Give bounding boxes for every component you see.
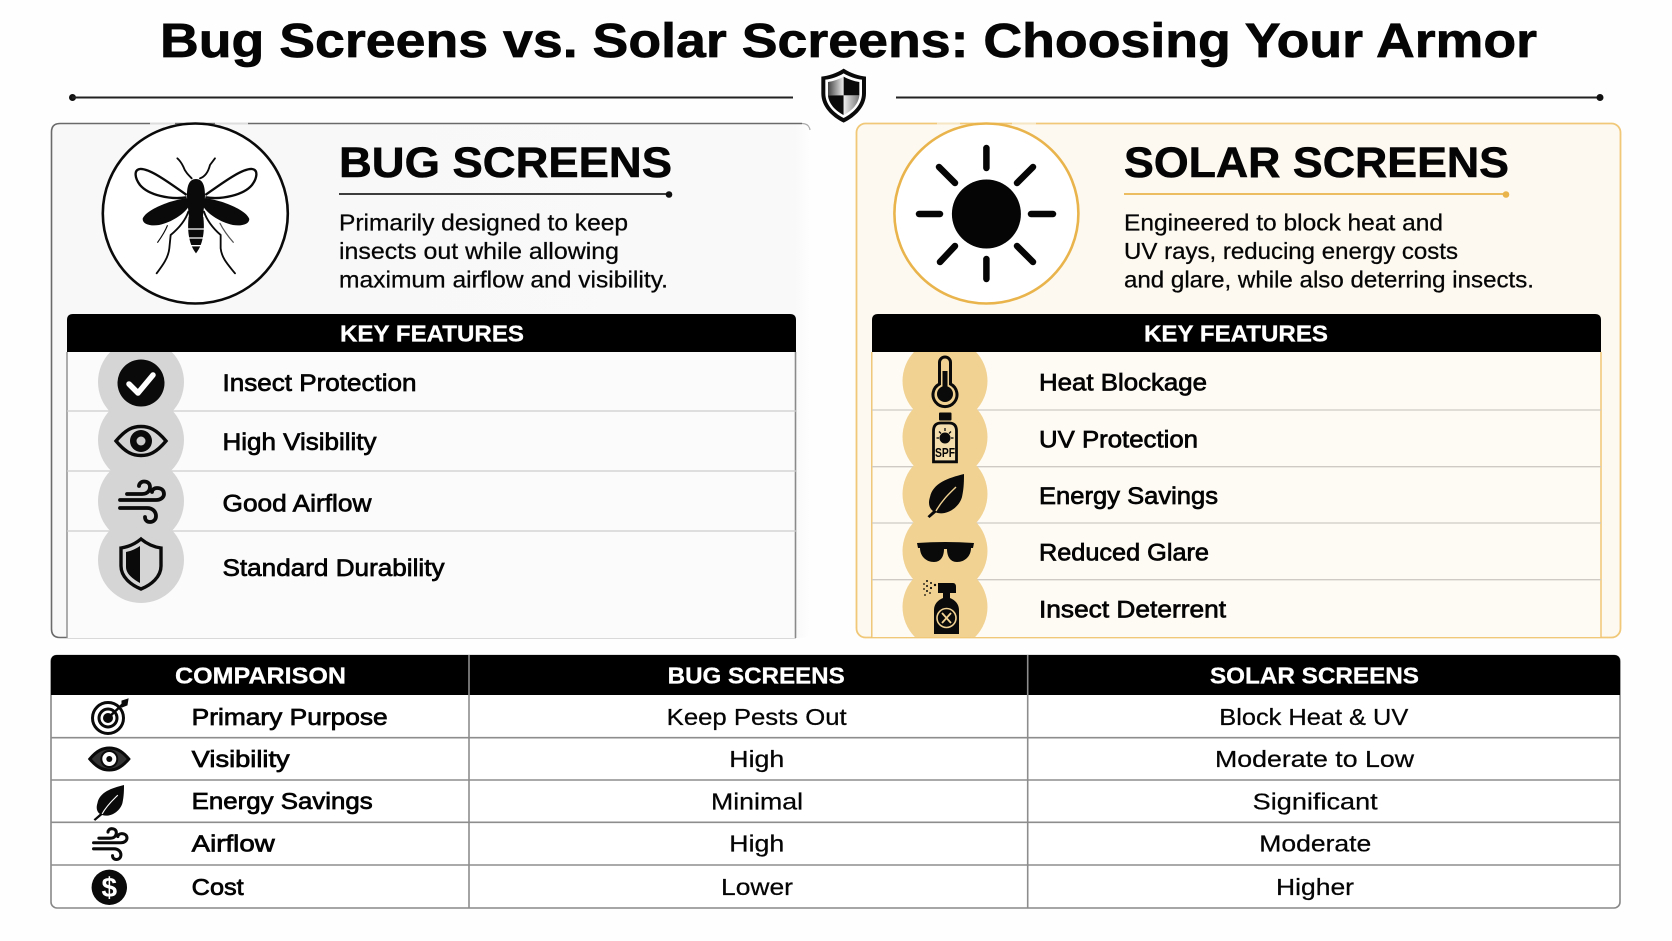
row: cost	[92, 870, 1354, 905]
row: cost: Lower	[721, 874, 793, 900]
icon: wind	[94, 829, 127, 859]
feature: good airflow: Good Airflow	[222, 490, 372, 518]
icon: eye	[116, 426, 166, 456]
feature: heat blockage: Heat Blockage	[1039, 370, 1207, 396]
feature: UV protection: UV Protection	[1039, 426, 1198, 453]
row: primary purpose: Primary Purpose	[192, 704, 388, 730]
icon: mosquito in circle	[103, 124, 288, 304]
key features header: KEY FEATURES	[1144, 320, 1328, 346]
row: energy savings: Significant	[1253, 788, 1378, 814]
description: solar screens	[1124, 210, 1534, 292]
row: energy savings: Minimal	[711, 788, 803, 814]
row: energy savings: Energy Savings	[192, 788, 373, 814]
icon: shield	[821, 69, 866, 123]
icon: dollar: $	[102, 872, 118, 903]
panel: solar screens	[856, 124, 1620, 650]
row: cost: Higher	[1276, 874, 1354, 900]
icon: eye	[90, 748, 129, 770]
row: primary purpose	[92, 699, 1409, 734]
heading: solar screens: SOLAR SCREENS	[1124, 139, 1509, 187]
heading rule	[1124, 191, 1509, 198]
title divider with shield	[69, 69, 1604, 123]
icon: SPF bottle	[934, 412, 956, 462]
icon: leaf	[94, 785, 124, 821]
icon: spray bottle	[923, 580, 959, 634]
key features header	[872, 314, 1601, 352]
heading: bug screens: BUG SCREENS	[339, 139, 672, 187]
description: solar screens: and glare, while also deterring insects.	[1124, 266, 1534, 292]
row: visibility: High	[729, 746, 784, 772]
icon: sunglasses	[917, 542, 974, 562]
feature: reduced glare: Reduced Glare	[1039, 540, 1209, 567]
feature: energy savings: Energy Savings	[1039, 483, 1218, 510]
description: bug screens: insects out while allowing	[339, 238, 619, 264]
icon: dollar	[92, 870, 127, 905]
icon: thermometer	[933, 357, 957, 407]
feature: high visibility: High Visibility	[222, 429, 376, 456]
icon: wind	[120, 482, 164, 522]
feature: insect deterrent: Insect Deterrent	[1039, 596, 1226, 623]
panel: bug screens	[51, 123, 810, 638]
row: energy savings	[94, 785, 1378, 821]
comparison table	[51, 655, 1620, 908]
icon: leaf	[928, 474, 964, 518]
description: solar screens: UV rays, reducing energy costs	[1124, 238, 1458, 264]
icon: shield half	[121, 539, 161, 589]
row: primary purpose: Keep Pests Out	[667, 704, 847, 730]
row: airflow	[94, 829, 1371, 859]
table header row	[175, 662, 1419, 688]
heading rule	[339, 191, 672, 198]
table header row: BUG SCREENS	[668, 662, 845, 688]
row: primary purpose: Block Heat & UV	[1219, 704, 1409, 730]
table header row: SOLAR SCREENS	[1210, 662, 1419, 688]
key features header	[67, 314, 796, 352]
icon: sun in circle	[894, 124, 1078, 304]
row: visibility	[90, 746, 1414, 772]
row: cost: Cost	[192, 874, 244, 900]
key features header: KEY FEATURES	[340, 320, 524, 346]
title: Bug Screens vs. Solar Screens: Choosing Your Armor	[160, 15, 1537, 68]
description: bug screens: Primarily designed to keep	[339, 210, 628, 236]
description: solar screens: Engineered to block heat and	[1124, 210, 1443, 236]
table header row: COMPARISON	[175, 662, 346, 688]
row: airflow: High	[729, 830, 784, 856]
row: visibility: Moderate to Low	[1215, 746, 1414, 772]
row: airflow: Moderate	[1259, 830, 1371, 856]
icon: check	[118, 360, 164, 406]
icon: SPF bottle: SPF	[935, 445, 955, 460]
feature badge circles	[902, 338, 988, 650]
row: airflow: Airflow	[192, 831, 275, 857]
feature badge circles	[98, 339, 184, 603]
feature: insect protection: Insect Protection	[222, 370, 416, 397]
feature: standard durability: Standard Durability	[222, 555, 444, 582]
description: bug screens	[339, 210, 668, 292]
row: visibility: Visibility	[192, 746, 290, 772]
icon: target	[92, 699, 128, 734]
description: bug screens: maximum airflow and visibility.	[339, 266, 668, 292]
